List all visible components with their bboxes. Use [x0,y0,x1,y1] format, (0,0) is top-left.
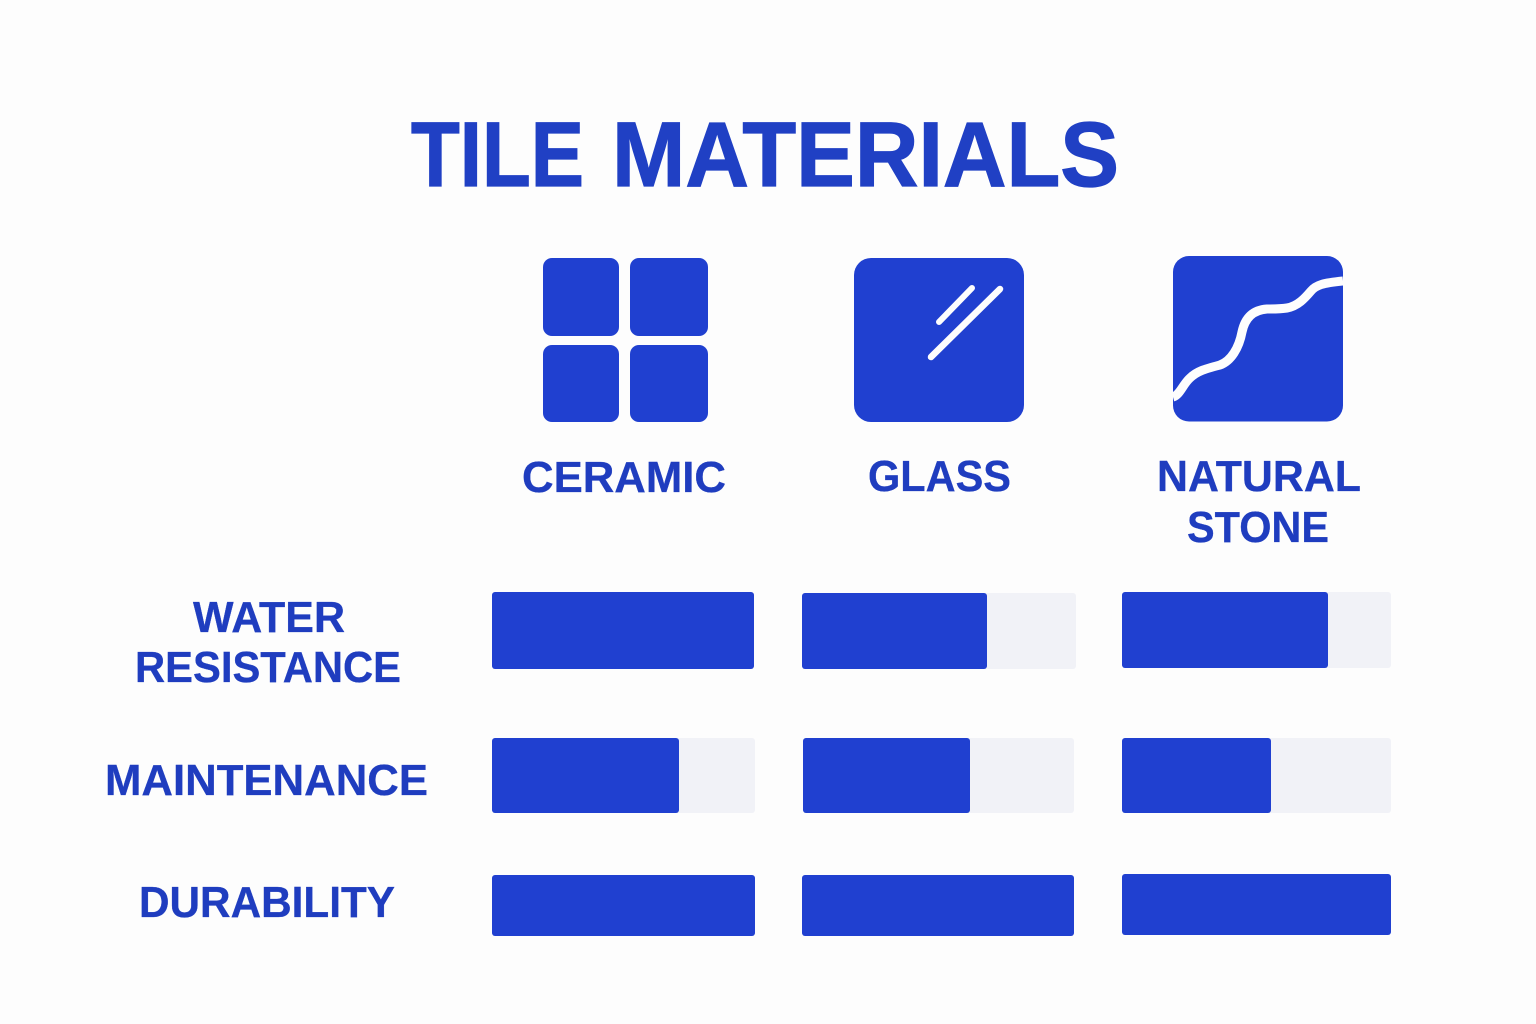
bar: stone durability [1122,874,1391,935]
bar: glass maintenance [803,738,1074,813]
row label: durability: DURABILITY [139,878,395,927]
row label: maintenance: MAINTENANCE [105,756,428,805]
title [411,104,1119,206]
title: MATERIALS [612,104,1119,206]
bar: glass water resistance [802,593,1076,669]
row label: water resistance: RESISTANCE [135,643,401,692]
bar: glass durability [802,875,1074,936]
icon: ceramic tile grid [543,258,708,422]
label: ceramic: CERAMIC [522,453,726,502]
bar: stone maintenance [1122,738,1391,813]
label: natural stone: NATURAL [1157,452,1361,501]
bar: stone water resistance [1122,592,1391,668]
label: glass: GLASS [868,452,1011,501]
row label: water resistance: WATER [193,593,345,642]
bar: ceramic water resistance [492,592,754,669]
title: TILE [411,104,584,206]
bar: ceramic durability [492,875,755,936]
row label: water resistance [135,593,401,692]
label: natural stone: STONE [1187,503,1329,552]
label: natural stone [1157,452,1361,552]
bar: ceramic maintenance [492,738,755,813]
icon: natural stone [1173,256,1343,422]
icon: glass pane [854,258,1024,422]
